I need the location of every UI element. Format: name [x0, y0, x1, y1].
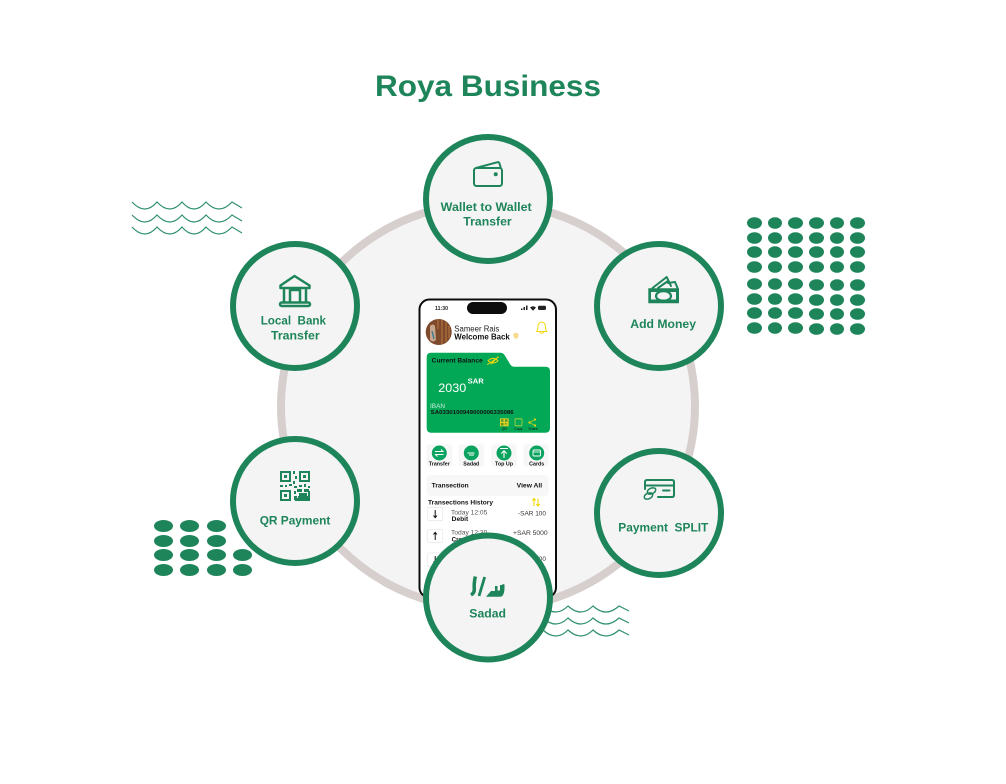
- card actions: Copy: [514, 427, 523, 431]
- row: debit: -SAR 100: [518, 511, 546, 518]
- node: sadad: Sadad: [469, 607, 506, 621]
- node: sadad: [426, 536, 550, 660]
- decorative waves: bottom right: [518, 606, 629, 636]
- profile avatar: [426, 319, 452, 345]
- row: credit: [428, 529, 548, 544]
- phone mockup: [420, 300, 556, 598]
- node: QR payment: QR Payment: [260, 514, 330, 528]
- quick actions: Top Up: [495, 461, 513, 467]
- row: credit: +SAR 5000: [513, 530, 548, 537]
- phone body: [420, 300, 556, 598]
- icon: wallet: [474, 162, 502, 186]
- status bar: 11:30: [435, 306, 448, 312]
- icon: QR code: [280, 471, 310, 501]
- icon: banknotes: [648, 277, 679, 303]
- decorative dots: lower left: [154, 520, 252, 576]
- card actions: Share: [528, 427, 538, 431]
- row: debit: [428, 507, 546, 523]
- balance card: IBAN: [430, 403, 445, 410]
- node: local bank transfer: [233, 244, 357, 368]
- status bar: [435, 302, 546, 314]
- transaction header bar: View All: [517, 483, 542, 490]
- quick actions: Sadad: [463, 461, 479, 467]
- title: Roya Business: [375, 70, 601, 103]
- node: add money: Add Money: [630, 317, 696, 331]
- card actions: QR: [502, 427, 507, 431]
- greeting: Welcome Back: [454, 333, 510, 342]
- row: credit: Today 12:30: [451, 529, 488, 536]
- node: payment split: Payment SPLIT: [618, 521, 709, 535]
- icon: sort arrows: [532, 498, 540, 506]
- node: wallet to wallet transfer: Wallet to Wallet: [441, 200, 532, 214]
- node: add money: [597, 244, 721, 368]
- decorative waves: top left: [132, 202, 242, 234]
- row: credit: Credit: [452, 538, 470, 544]
- icon: bell: [536, 322, 547, 333]
- transaction header bar: [427, 475, 549, 496]
- greeting: [454, 325, 518, 342]
- central ring: [281, 203, 695, 609]
- card actions: [500, 418, 538, 431]
- transactions history: Transections History: [428, 500, 493, 507]
- node: wallet to wallet transfer: [426, 137, 550, 261]
- transaction header bar: Transection: [432, 483, 469, 490]
- quick actions: [427, 444, 549, 467]
- node: local bank transfer: Transfer: [271, 329, 320, 343]
- balance card: SAR: [468, 379, 484, 386]
- balance card: 2030: [438, 381, 467, 395]
- row: third transaction: -SAR 100: [518, 556, 546, 563]
- row: debit: Debit: [452, 517, 468, 523]
- quick actions: Cards: [529, 461, 544, 467]
- balance card: Current Balance: [432, 358, 483, 365]
- node: wallet to wallet transfer: Transfer: [463, 215, 512, 229]
- icon: card with coins: [643, 480, 674, 500]
- balance card: [427, 353, 550, 433]
- greeting: Sameer Rais: [454, 325, 499, 334]
- balance card: SA0330100949000006335086: [431, 410, 514, 416]
- icon: sadad logo: [471, 576, 505, 597]
- icon: bank: [280, 276, 310, 306]
- row: debit: Today 12:05: [451, 509, 488, 516]
- decorative dots: right: [747, 217, 865, 335]
- node: payment split: [597, 451, 721, 575]
- node: local bank transfer: Local Bank: [261, 314, 326, 328]
- icon: hidden eye: [488, 357, 498, 364]
- node: QR payment: [233, 439, 357, 563]
- transactions history: [428, 498, 548, 567]
- quick actions: Transfer: [429, 461, 450, 467]
